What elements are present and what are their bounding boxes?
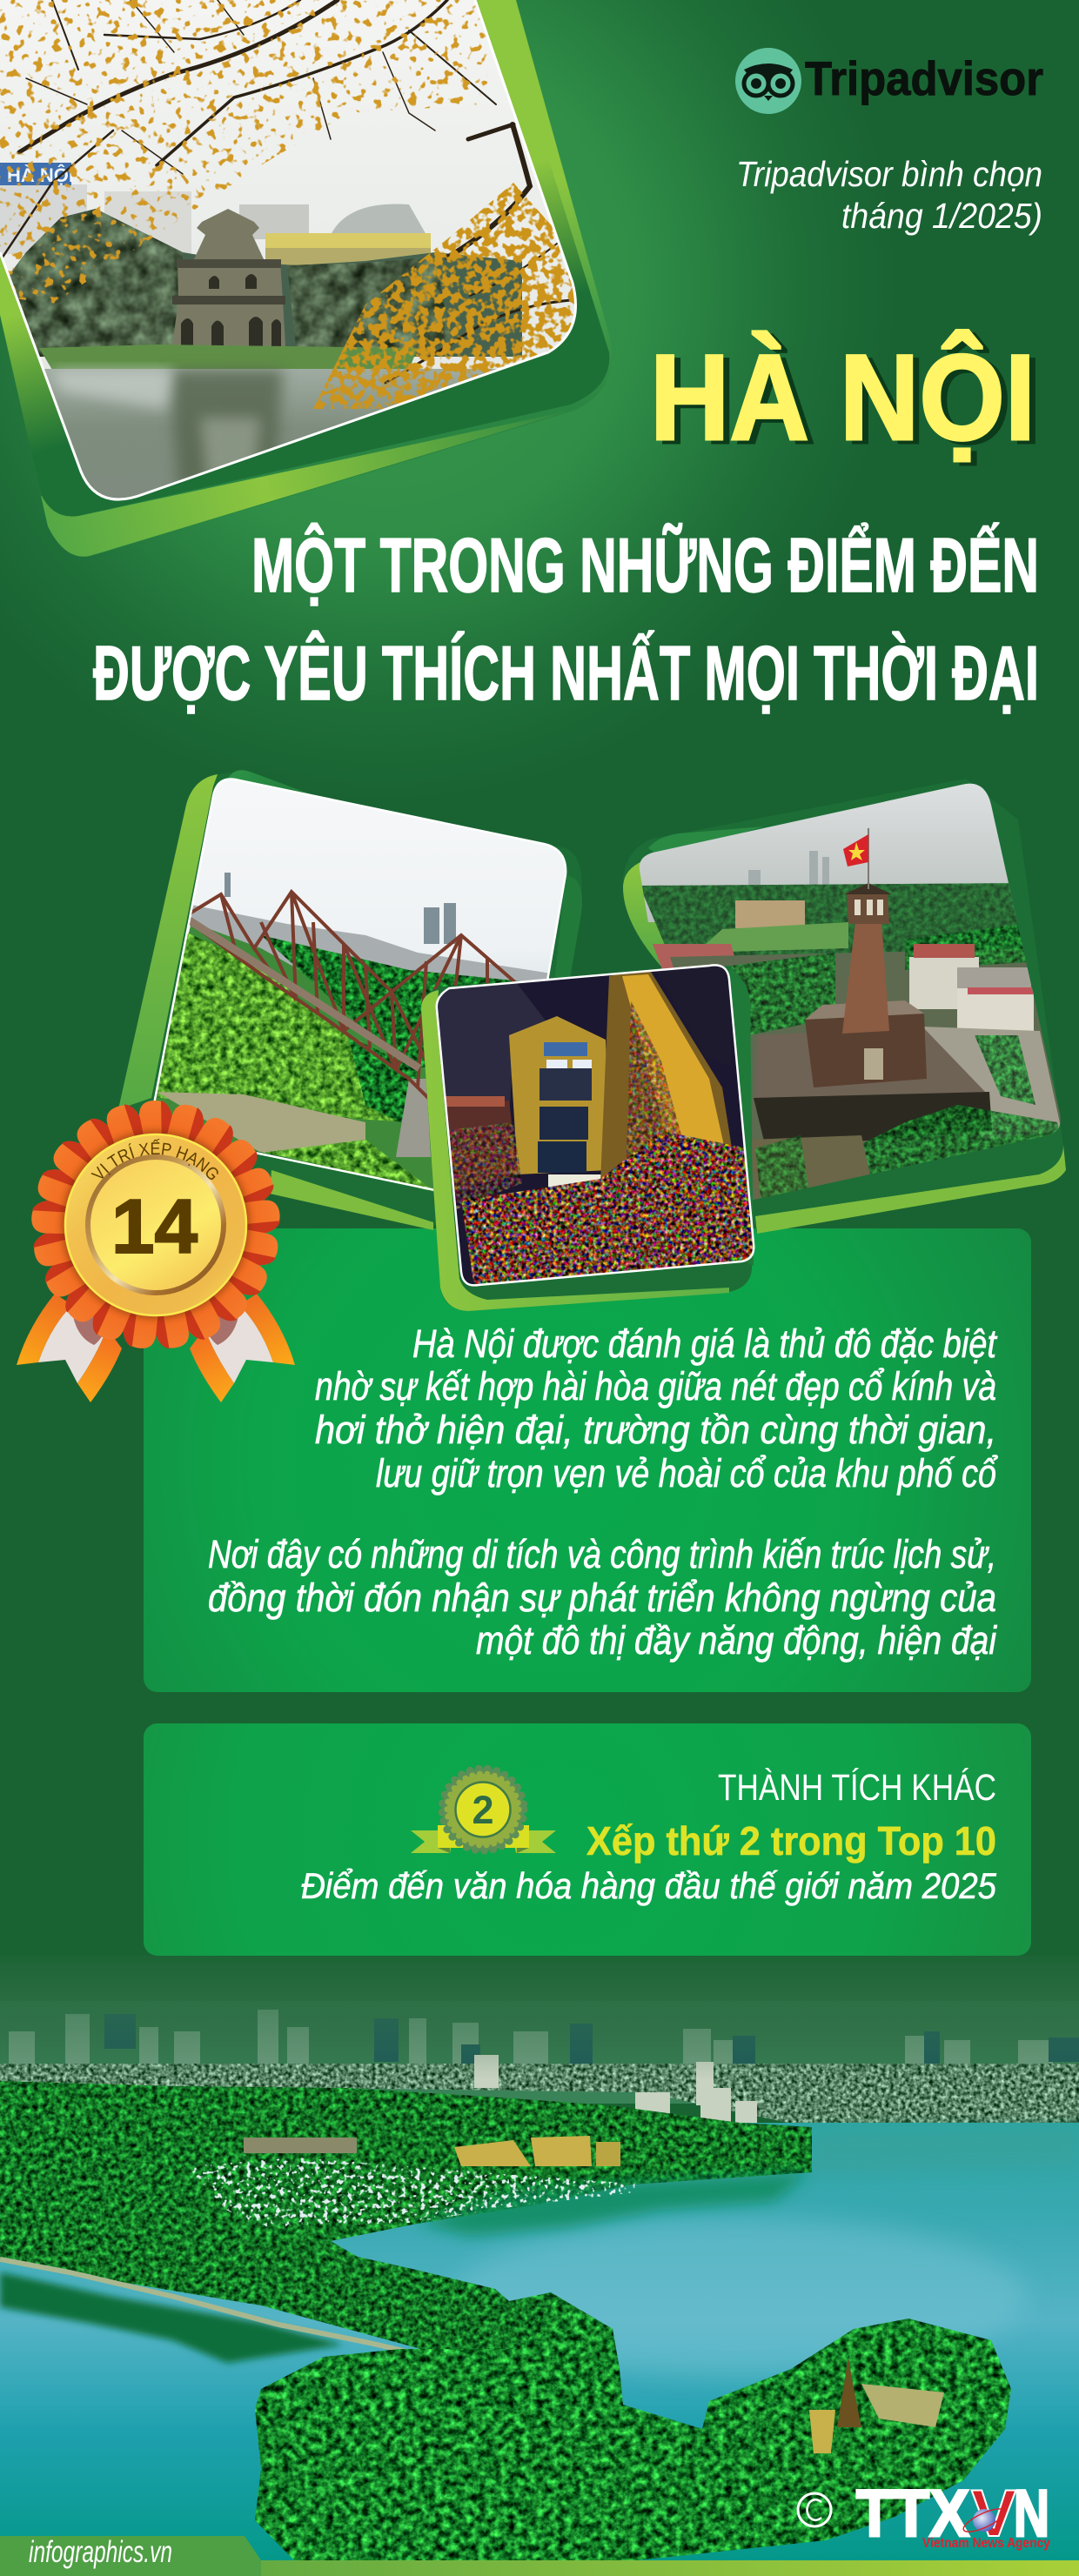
- flag: [843, 828, 868, 889]
- reflections: [0, 2172, 809, 2363]
- white colonial buildings: [909, 944, 1034, 1033]
- skyline: [0, 2001, 1079, 2131]
- paragraph 2: một đô thị đầy năng động, hiện đại: [476, 1618, 998, 1663]
- lit street: [487, 967, 748, 1279]
- panel: description text box: [144, 1228, 1031, 1692]
- central island trees: [255, 2297, 1011, 2562]
- achievement detail: Điểm đến văn hóa hàng đầu thế giới năm 2025: [301, 1865, 997, 1906]
- waterfront boats and villas: [187, 2158, 635, 2227]
- agency initials: [856, 2477, 1049, 2551]
- night photo frame: [421, 966, 754, 1311]
- bridge photo border: [150, 779, 566, 1190]
- source note: Tripadvisor bình chọn: [736, 154, 1042, 194]
- source tab: infographics.vn: [0, 2535, 261, 2576]
- photo: Turtle Tower on Hoan Kiem lake: HÀ NỘI: [7, 164, 74, 186]
- paragraph 2: đồng thời đón nhận sự phát triển không ngừng của: [208, 1576, 996, 1620]
- title: HÀ NỘI: HÀ NỘI: [656, 332, 1042, 469]
- photo group: Long Bien bridge: [118, 766, 582, 1230]
- yellow halls: [244, 2136, 620, 2166]
- source note: tháng 1/2025): [841, 196, 1042, 236]
- golden leaves: [0, 0, 487, 304]
- tower: [842, 924, 889, 1034]
- panel: other achievements box: [144, 1723, 1031, 1956]
- badge: rank 2: [411, 1769, 556, 1853]
- ribbons: [17, 1294, 295, 1402]
- achievements text: [301, 1767, 997, 1906]
- logo: TTXVN copyright: [798, 2477, 1050, 2551]
- bridge frame: [118, 770, 582, 1230]
- bridge truss: [185, 892, 516, 1105]
- causeway: [0, 2259, 433, 2358]
- achievements heading: THÀNH TÍCH KHÁC: [718, 1767, 996, 1809]
- gold coin: [65, 1134, 246, 1315]
- panel: top hero photo of Turtle Tower with green frame: [0, 0, 613, 557]
- photo group: Old Quarter night street: [421, 957, 761, 1311]
- grass bank: [39, 345, 418, 370]
- shore trees near: [0, 2081, 812, 2369]
- bridge photo: [156, 779, 565, 1192]
- footer strip: [0, 2560, 1079, 2576]
- badge ribbon: [411, 1825, 556, 1853]
- paragraph 2: [208, 1532, 998, 1663]
- photo white border: [0, 0, 576, 499]
- night photo border: [437, 965, 754, 1285]
- agency initials: TTX: [856, 2477, 969, 2551]
- badge centre: [456, 1782, 510, 1837]
- logo wordmark: Tripadvisor: [805, 51, 1043, 105]
- achievement highlight: Xếp thứ 2 trong Top 10: [586, 1818, 996, 1863]
- dark roof: [653, 961, 731, 1066]
- rosette petals: [30, 1101, 281, 1350]
- flag tower photo: [627, 774, 1070, 1205]
- medal number: 14: [111, 1183, 198, 1269]
- source tab: infographics.vn: infographics.vn: [29, 2535, 172, 2569]
- dark green inner frame: [0, 0, 609, 517]
- scalloped outer seal: [442, 1769, 524, 1850]
- branches: [0, 0, 571, 383]
- icon: owl: [735, 48, 801, 114]
- crowd: [461, 1131, 755, 1288]
- source note: [736, 154, 1042, 236]
- description text: [208, 1321, 998, 1663]
- pier: [396, 1079, 431, 1157]
- photo: West Lake panorama: [0, 1956, 1079, 2562]
- light green frame: [0, 0, 613, 557]
- title: HÀ NỘI: HÀ NỘI: [650, 329, 1035, 465]
- medal arc label: VỊ TRÍ XẾP HẠNG: [90, 1139, 218, 1180]
- medal: rank 14 rosette: [17, 1101, 295, 1402]
- globe: [961, 2505, 1008, 2536]
- flag tower frame: [623, 779, 1066, 1234]
- paragraph 1: hơi thở hiện đại, trường tồn cùng thời gian,: [315, 1408, 996, 1452]
- foreground trees: [853, 1105, 1062, 1192]
- ground right: [922, 1027, 1062, 1140]
- lake water: [0, 2123, 1079, 2562]
- agency initials: N: [1014, 2477, 1049, 2551]
- tower: [172, 209, 285, 346]
- agency name: Vietnam News Agency: [922, 2536, 1050, 2551]
- yellow corner building: [509, 1016, 609, 1194]
- pagoda: [809, 2358, 944, 2453]
- night street photo: [431, 957, 761, 1292]
- subtitle: [93, 522, 1039, 716]
- paragraph 1: [315, 1321, 998, 1495]
- agency initials: V: [971, 2477, 1016, 2551]
- badge number: 2: [472, 1788, 494, 1832]
- photo group: Hanoi Flag Tower: [623, 774, 1070, 1234]
- scalloped inner seal: [447, 1774, 519, 1845]
- lake water: [44, 362, 497, 498]
- photo: Turtle Tower on Hoan Kiem lake: [0, 0, 592, 522]
- Tripadvisor logo: [735, 48, 1043, 114]
- copyright mark: [798, 2493, 831, 2526]
- fortress platform: [755, 1027, 988, 1101]
